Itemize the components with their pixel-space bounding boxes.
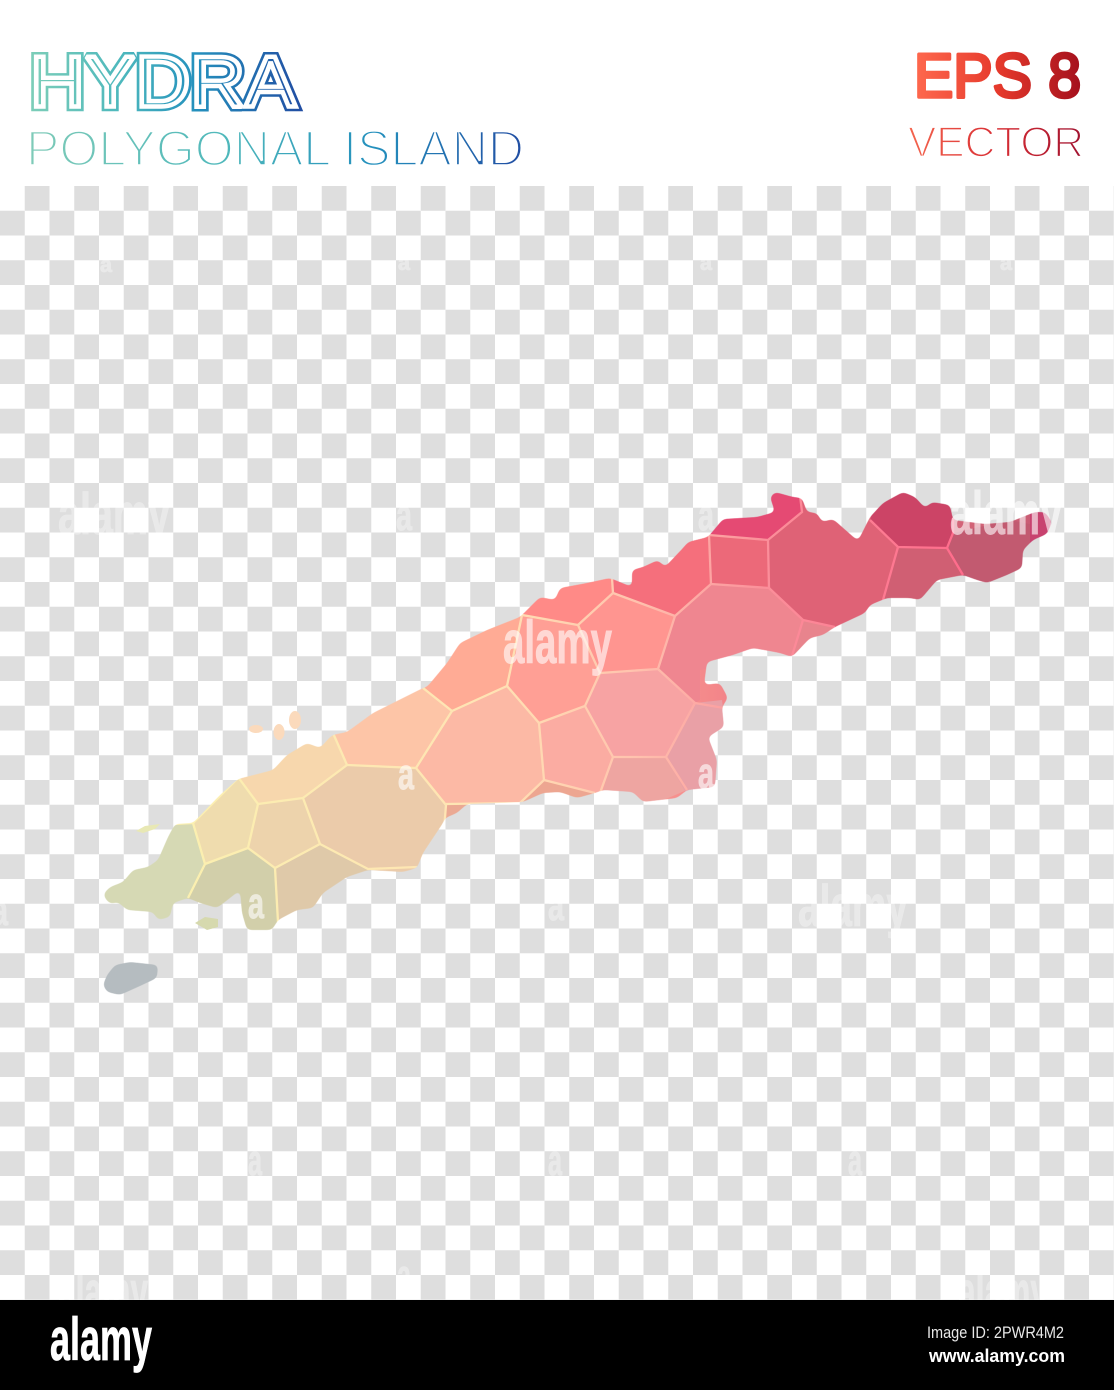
footer: website: www.alamy.com (928, 1346, 1065, 1366)
subtitle: POLYGONAL ISLAND: POLYGONAL ISLAND (26, 120, 524, 176)
faint watermarks on checkerboard: a (398, 250, 411, 275)
sliver islet west (136, 824, 160, 833)
title: HYDRA: HYDRA (30, 42, 296, 122)
main island cells (90, 480, 1070, 950)
faint watermarks on checkerboard: alamy (798, 874, 908, 939)
faint watermarks on checkerboard: alamy (58, 482, 170, 547)
badge: EPS 8: EPS 8 (914, 42, 1081, 111)
faint watermarks on checkerboard (0, 250, 1048, 1325)
faint watermarks on checkerboard: a (700, 250, 713, 275)
faint watermarks on checkerboard: a (396, 491, 412, 540)
grey islet south-west (103, 962, 158, 995)
watermark on island (248, 480, 1062, 928)
title: HYDRA: HYDRA (30, 42, 296, 122)
faint watermarks on checkerboard: a (248, 1136, 262, 1185)
watermark on island: a (398, 750, 414, 799)
faint watermarks on checkerboard: a (100, 252, 113, 277)
badge: VECTOR: VECTOR (908, 118, 1084, 166)
faint watermarks on checkerboard: a (397, 1251, 411, 1300)
watermark on island: alamy (503, 609, 612, 676)
footer bar (0, 1300, 1114, 1390)
faint watermarks on checkerboard: a (548, 881, 564, 930)
faint watermarks on checkerboard: a (1000, 250, 1013, 275)
faint watermarks on checkerboard: a (698, 491, 714, 540)
watermark on island: a (698, 749, 714, 798)
faint watermarks on checkerboard: alamy (58, 1260, 148, 1325)
faint watermarks on checkerboard: a (548, 1136, 562, 1185)
cell borders (175, 495, 963, 922)
small islet south (195, 917, 218, 930)
faint watermarks on checkerboard: a (848, 1136, 862, 1185)
footer: image ID: Image ID: 2PWR4M2 (927, 1323, 1064, 1342)
watermark on island: a (248, 879, 264, 928)
map: Hydra island polygonal mosaic (90, 480, 1070, 995)
small islets north (249, 711, 301, 740)
footer logo: alamy: alamy (50, 1306, 152, 1373)
